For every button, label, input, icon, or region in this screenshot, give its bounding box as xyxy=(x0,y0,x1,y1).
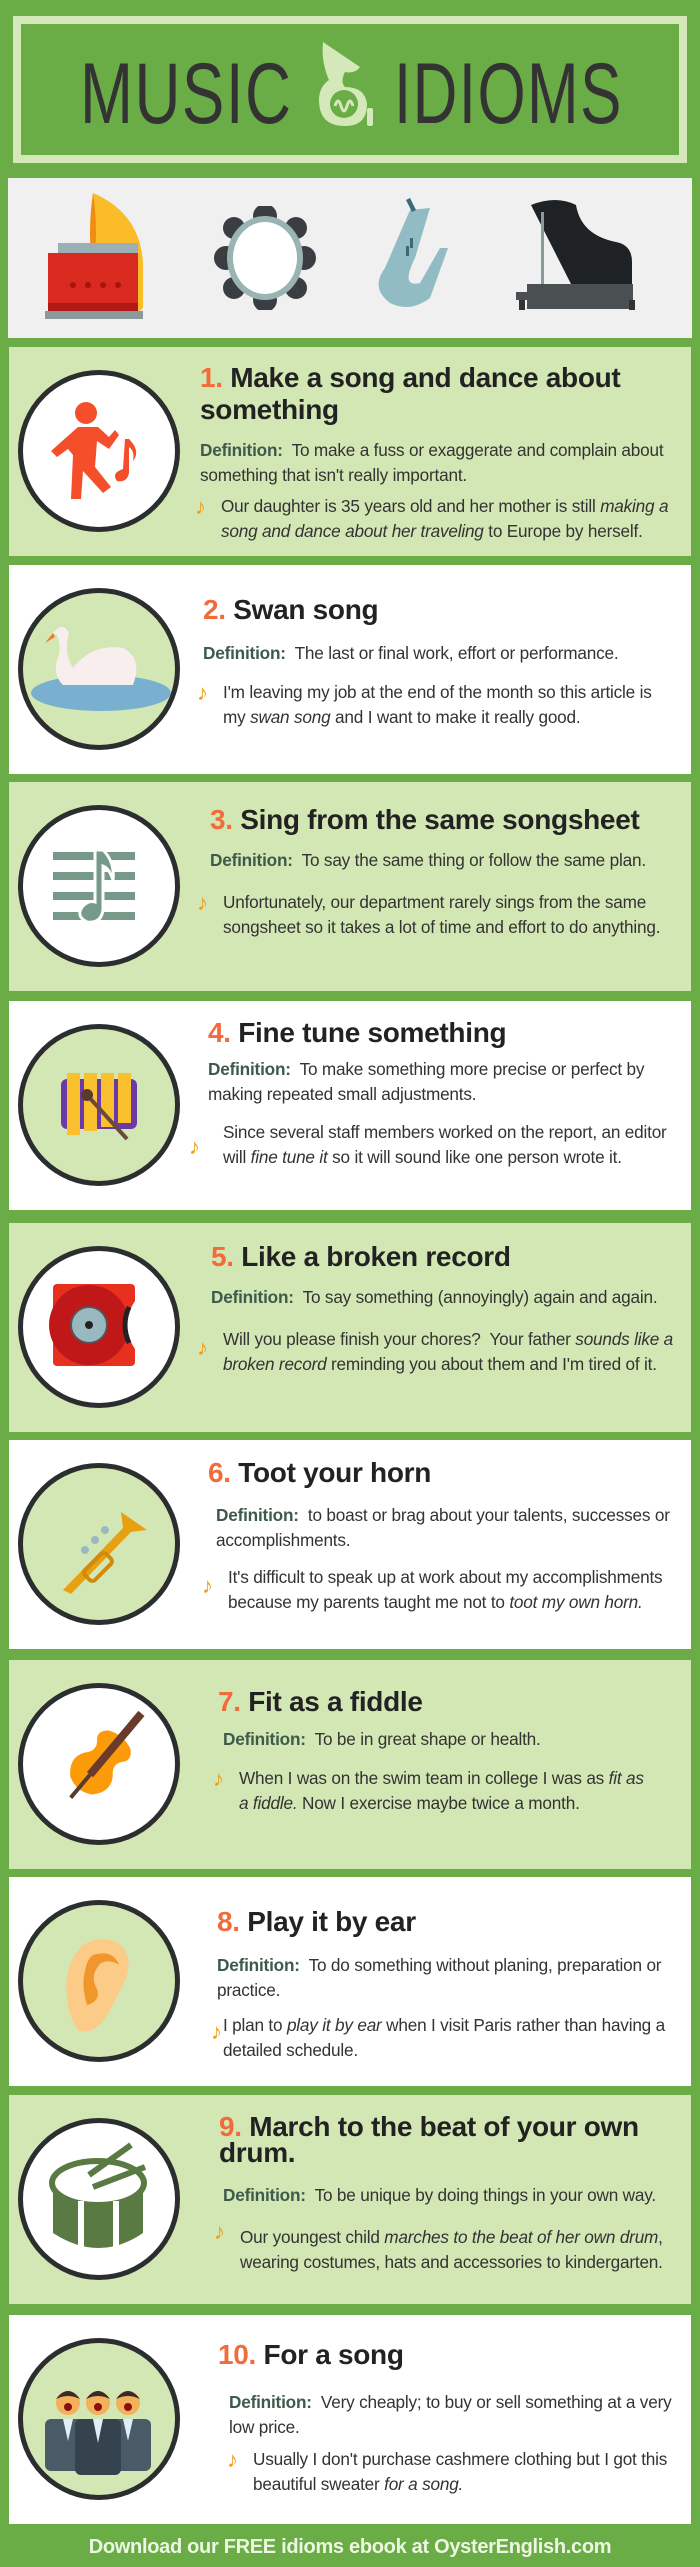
header frame xyxy=(13,16,687,163)
definition: Definition: To do something without planing, preparation or xyxy=(217,1955,661,1975)
panel: idiom 8 xyxy=(9,1877,691,2086)
example: song and dance about her traveling to Europe by herself. xyxy=(221,521,643,541)
definition: Definition: To say something (annoyingly) again and again. xyxy=(211,1287,657,1307)
heading: 9. March to the beat of your own xyxy=(219,2111,639,2142)
panel: idiom 6 xyxy=(9,1440,691,1649)
panel: idiom 3: ♪ xyxy=(197,890,208,915)
panel: idiom 4: ♪ xyxy=(189,1134,200,1159)
example: It's difficult to speak up at work about my accomplishments xyxy=(228,1567,662,1587)
icon: grand piano xyxy=(516,200,635,310)
panel: instruments xyxy=(8,178,692,338)
example xyxy=(197,890,660,937)
icon: drum xyxy=(18,2118,180,2280)
heading: something xyxy=(200,394,339,425)
definition: Definition: The last or final work, effort or performance. xyxy=(203,643,618,663)
icon: gramophone xyxy=(45,193,143,319)
example xyxy=(227,2447,667,2494)
example: beautiful sweater for a song. xyxy=(253,2474,463,2494)
example: my swan song and I want to make it really good. xyxy=(223,707,580,727)
icon: saxophone xyxy=(378,198,448,307)
heading: 5. Like a broken record xyxy=(211,1241,511,1272)
definition xyxy=(208,1059,644,1104)
definition: Definition: To be unique by doing things in your own way. xyxy=(223,2185,656,2205)
heading xyxy=(200,362,620,425)
example: When I was on the swim team in college I was as fit as xyxy=(239,1768,644,1788)
definition xyxy=(216,1505,670,1550)
definition: Definition: To make something more precise or perfect by xyxy=(208,1059,644,1079)
definition: Definition: to boast or brag about your talents, successes or xyxy=(216,1505,670,1525)
definition xyxy=(217,1955,662,2000)
example: I plan to play it by ear when I visit Paris rather than having a xyxy=(223,2015,665,2035)
definition: practice. xyxy=(217,1980,280,2000)
icon: ear xyxy=(18,1900,180,2062)
example: Unfortunately, our department rarely sings from the same xyxy=(223,892,646,912)
panel: idiom 5: ♪ xyxy=(197,1335,208,1360)
panel: idiom 1 xyxy=(9,347,691,556)
heading: 7. Fit as a fiddle xyxy=(218,1686,423,1717)
panel: idiom 10 xyxy=(9,2315,691,2524)
example: Our daughter is 35 years old and her mother is still making a xyxy=(221,496,668,516)
example: Usually I don't purchase cashmere clothing but I got this xyxy=(253,2449,667,2469)
heading: 3. Sing from the same songsheet xyxy=(210,804,640,835)
icon: broken record xyxy=(18,1246,180,1408)
definition: making repeated small adjustments. xyxy=(208,1084,476,1104)
definition xyxy=(229,2392,672,2437)
icon: singers xyxy=(18,2338,180,2500)
heading: 1. Make a song and dance about xyxy=(200,362,620,393)
example: broken record reminding you about them and I'm tired of it. xyxy=(223,1354,657,1374)
icon: tambourine xyxy=(214,206,316,310)
panel: idiom 4 xyxy=(9,1001,691,1210)
example xyxy=(189,1122,667,1167)
panel: idiom 10: ♪ xyxy=(227,2447,238,2472)
heading: 2. Swan song xyxy=(203,594,378,625)
example: a fiddle. Now I exercise maybe twice a month. xyxy=(239,1793,580,1813)
panel: idiom 2 xyxy=(9,565,691,774)
example: Will you please finish your chores? Your father sounds like a xyxy=(223,1329,673,1349)
definition: low price. xyxy=(229,2417,300,2437)
example: because my parents taught me not to toot my own horn. xyxy=(228,1592,643,1612)
icon: xylophone xyxy=(18,1024,180,1186)
definition: accomplishments. xyxy=(216,1530,350,1550)
example xyxy=(213,1766,644,1813)
panel: idiom 7 xyxy=(9,1660,691,1869)
icon: swan xyxy=(18,588,180,750)
definition: Definition: Very cheaply; to buy or sell something at a very xyxy=(229,2392,671,2412)
definition xyxy=(200,440,664,485)
panel: idiom 1: ♪ xyxy=(195,494,206,519)
definition: Definition: To say the same thing or follow the same plan. xyxy=(210,850,646,870)
heading: 4. Fine tune something xyxy=(208,1017,506,1048)
example xyxy=(195,494,668,541)
icon: dancer xyxy=(18,370,180,532)
title xyxy=(80,42,623,142)
panel: idiom 5 xyxy=(9,1223,691,1432)
heading: 8. Play it by ear xyxy=(217,1906,416,1937)
example: will fine tune it so it will sound like one person wrote it. xyxy=(223,1147,622,1167)
definition: Definition: To make a fuss or exaggerate and complain about xyxy=(200,440,663,460)
heading: drum. xyxy=(219,2137,295,2168)
panel: idiom 9: ♪ xyxy=(214,2219,225,2244)
icon: trumpet xyxy=(18,1463,180,1625)
example xyxy=(197,1329,673,1374)
panel: idiom 6: ♪ xyxy=(202,1573,213,1598)
example xyxy=(211,2015,666,2060)
example: detailed schedule. xyxy=(223,2040,358,2060)
example xyxy=(202,1567,662,1612)
definition: something that isn't really important. xyxy=(200,465,467,485)
heading: 10. For a song xyxy=(218,2339,404,2370)
panel: idiom 9 xyxy=(9,2095,691,2304)
example: songsheet so it takes a lot of time and effort to do anything. xyxy=(223,917,660,937)
panel: idiom 7: ♪ xyxy=(213,1766,224,1791)
footer: Download our FREE idioms ebook at OysterEnglish.com xyxy=(89,2536,611,2558)
title: MUSIC xyxy=(80,46,292,142)
definition: Definition: To be in great shape or health. xyxy=(223,1729,541,1749)
example: Since several staff members worked on the report, an editor xyxy=(223,1122,667,1142)
icon: fiddle xyxy=(18,1683,180,1845)
example: I'm leaving my job at the end of the month so this article is xyxy=(223,682,652,702)
icon: french horn xyxy=(319,42,373,126)
icon: songsheet xyxy=(18,805,180,967)
panel: idiom 2: ♪ xyxy=(197,680,208,705)
heading: 6. Toot your horn xyxy=(208,1457,431,1488)
panel: idiom 8: ♪ xyxy=(211,2019,222,2044)
panel: idiom 3 xyxy=(9,782,691,991)
heading xyxy=(219,2111,639,2168)
title: IDIOMS xyxy=(394,46,623,142)
example xyxy=(214,2219,663,2272)
example: wearing costumes, hats and accessories to kindergarten. xyxy=(240,2252,663,2272)
example: Our youngest child marches to the beat of her own drum, xyxy=(240,2227,663,2247)
example xyxy=(197,680,652,727)
